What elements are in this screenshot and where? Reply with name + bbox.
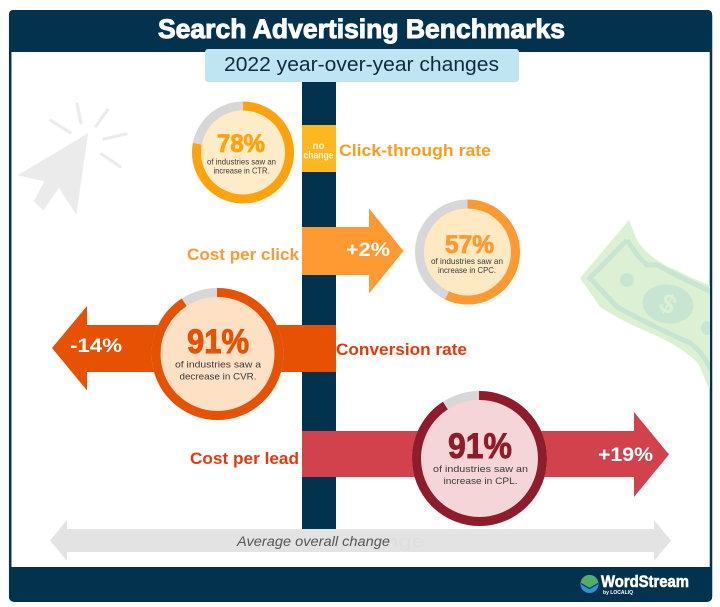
title: Search Advertising Benchmarks	[158, 14, 565, 44]
arrow: average overall change axis	[50, 520, 671, 561]
donut: CPL: increase in CPL.	[444, 476, 518, 487]
donut: CPL: of industries saw an	[433, 464, 528, 475]
donut: CTR: of industries saw an	[207, 156, 276, 166]
no change marker	[302, 125, 336, 172]
arrow: cost per click: +2%	[346, 240, 390, 261]
donut: CPC	[420, 204, 516, 300]
donut: CPC: of industries saw an	[431, 256, 503, 266]
donut: CTR	[196, 106, 290, 199]
donut: CPC: 57%	[445, 231, 494, 259]
arrow: average overall change axis: nge	[385, 532, 425, 551]
label: conversion rate: Conversion rate	[336, 340, 467, 359]
logo: WordStream	[580, 572, 689, 596]
subtitle box	[205, 49, 519, 82]
arrow: average overall change axis: Average overall change	[236, 534, 390, 549]
arrow: conversion rate	[52, 306, 336, 390]
label: cost per click: Cost per click	[187, 245, 300, 264]
icon: mouse cursor	[19, 104, 126, 214]
no change marker: no	[312, 141, 325, 152]
arrow: conversion rate: -14%	[70, 336, 122, 357]
donut: CPL	[416, 396, 542, 522]
label: click-through rate: Click-through rate	[339, 141, 491, 160]
label: cost per lead: Cost per lead	[190, 449, 299, 468]
icon: dollar bill	[580, 220, 715, 389]
no change marker: change	[304, 150, 334, 162]
donut: CVR: of industries saw a	[175, 360, 262, 370]
donut: CVR: 91%	[187, 323, 249, 361]
arrow: cost per lead: +19%	[598, 445, 653, 466]
arrow: cost per lead	[302, 412, 669, 497]
vertical axis	[302, 82, 336, 529]
donut: CVR	[156, 292, 279, 416]
icon: dollar bill: $	[654, 287, 682, 321]
arrow: cost per click	[302, 208, 404, 294]
footer band	[9, 567, 712, 601]
donut: CVR: decrease in CVR.	[180, 372, 256, 382]
donut: CPL: 91%	[448, 427, 512, 466]
donut: CPC: increase in CPC.	[438, 265, 496, 275]
subtitle box: 2022 year-over-year changes	[224, 54, 499, 76]
donut: CTR: increase in CTR.	[214, 166, 270, 176]
logo: WordStream: WordStream	[601, 572, 689, 591]
donut: CTR: 78%	[217, 130, 265, 158]
logo: WordStream: by LOCALIQ	[603, 590, 633, 596]
header band	[9, 10, 712, 52]
